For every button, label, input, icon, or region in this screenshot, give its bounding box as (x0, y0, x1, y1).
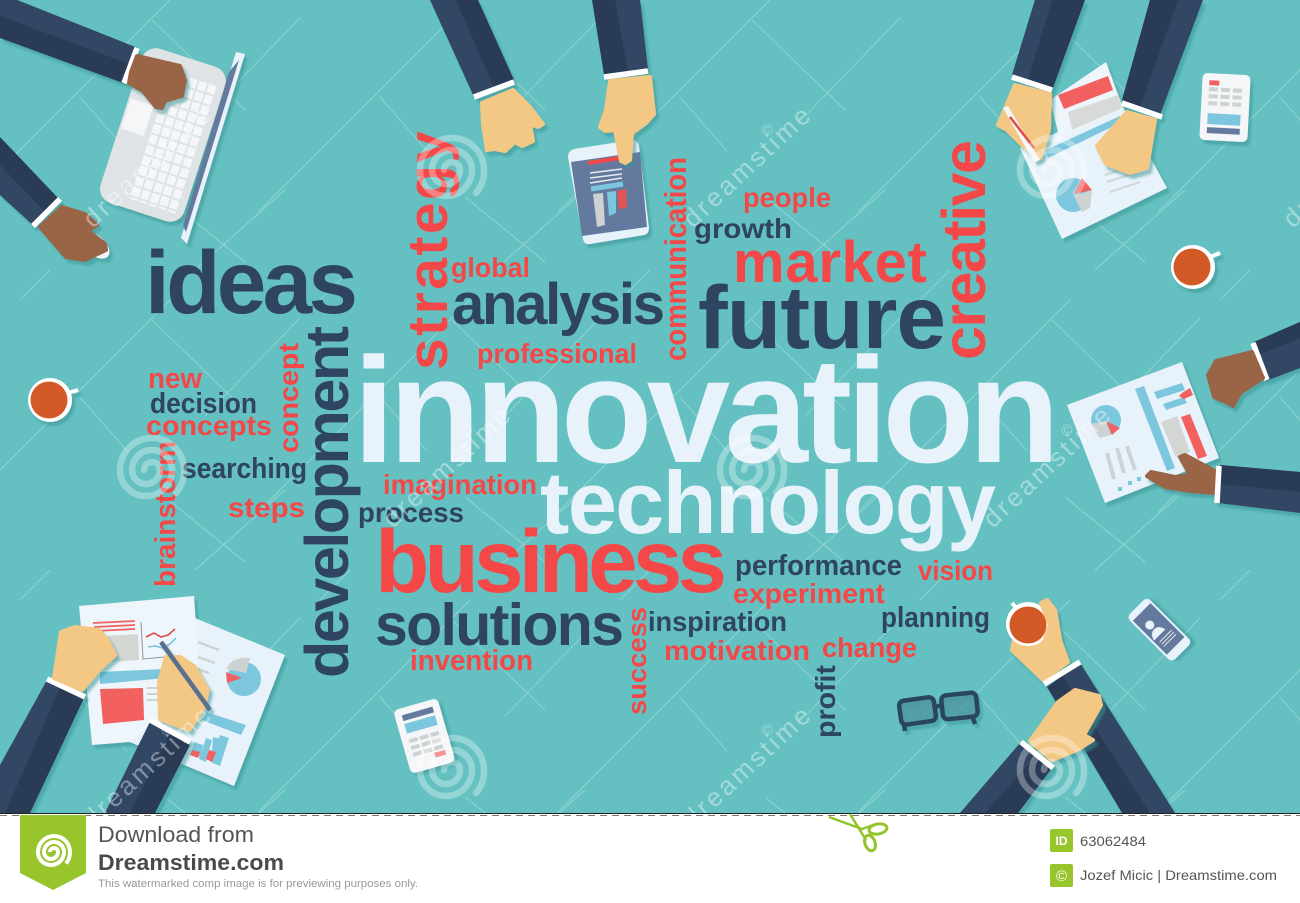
word: experiment: experiment (733, 578, 885, 609)
documents: top right (1020, 62, 1167, 239)
word: motivation: motivation (664, 635, 810, 666)
spiral mark: bottom right (1020, 738, 1084, 796)
word: steps: steps (228, 492, 305, 523)
word: concepts: concepts (146, 410, 272, 441)
word: profit: profit (810, 665, 841, 738)
phone (1126, 597, 1192, 663)
word: development: development (293, 326, 361, 678)
word: imagination: imagination (383, 469, 537, 500)
watermark: bottom left: dreamstime (77, 700, 216, 833)
word: growth: growth (694, 213, 792, 244)
id badge: ID (1056, 834, 1068, 848)
watermark: middle: dreamstime (377, 400, 516, 533)
word: vision: vision (918, 555, 993, 586)
word: searching: searching (182, 453, 307, 485)
word: creative: creative (930, 140, 998, 360)
word: success: success (622, 607, 652, 715)
arm: bottom left second with pen (105, 642, 210, 813)
word: market: market (733, 230, 927, 295)
coffee cup in hand (1006, 600, 1068, 680)
watermark: top centre: © (761, 122, 773, 139)
arm: right upper (1208, 322, 1300, 406)
arm: top centre right pointing (592, 0, 654, 163)
arm: bottom left first (0, 627, 115, 813)
watermark: bottom centre: © (761, 722, 773, 739)
copyright badge: © (1056, 868, 1067, 885)
word: invention: invention (410, 645, 533, 677)
word: change: change (822, 632, 917, 663)
watermark: bottom left: © (161, 722, 173, 739)
dreamstime brand: Dreamstime.com (98, 850, 284, 875)
word: performance: performance (735, 550, 902, 582)
coffee cup: left (28, 378, 78, 422)
arm: top right second (1097, 0, 1203, 173)
word: people: people (743, 182, 831, 213)
arm: bottom right crossing (960, 690, 1101, 813)
word: technology: technology (540, 453, 996, 552)
watermark: top centre: dreamstime (677, 100, 816, 233)
glasses (898, 692, 978, 731)
spiral mark: top right (1020, 138, 1084, 196)
coffee cup: top right (1171, 245, 1220, 289)
spiral mark: centre (720, 438, 784, 496)
copyright badge (1050, 864, 1073, 887)
word: innovation: innovation (353, 326, 1060, 494)
watermark: right: dreamstime (977, 400, 1116, 533)
document: right (1067, 362, 1219, 503)
word: global: global (451, 252, 530, 283)
word: solutions: solutions (375, 592, 624, 658)
word: inspiration: inspiration (648, 606, 787, 637)
word: analysis: analysis (452, 272, 665, 337)
footer strip (0, 814, 1300, 903)
spiral mark: top centre (420, 138, 484, 196)
arm: right lower (1147, 455, 1300, 513)
word: business: business (375, 511, 727, 611)
tablet (568, 140, 649, 244)
word: process: process (358, 497, 464, 528)
watermark spirals (120, 138, 1084, 796)
arm: top right first with pen (998, 0, 1085, 162)
calculator: top right (1199, 73, 1251, 142)
download text: Download from (98, 822, 254, 847)
word: concept: concept (273, 343, 304, 453)
word cloud (145, 131, 1060, 738)
laptop (96, 44, 245, 244)
watermark: middle: © (461, 422, 473, 439)
id number: 63062484 (1080, 833, 1146, 849)
icon: scissors (829, 814, 888, 852)
watermark: right: © (1061, 422, 1073, 439)
word: future: future (698, 267, 946, 367)
word: planning: planning (881, 602, 990, 634)
watermark text (77, 100, 1300, 833)
arm: left with mouse (0, 137, 114, 264)
watermark: top left: dreamstime (77, 100, 216, 233)
word: decision: decision (150, 388, 257, 420)
word: professional: professional (477, 338, 637, 369)
watermark: bottom centre: dreamstime (677, 700, 816, 833)
word: new: new (148, 363, 202, 395)
logo badge (20, 815, 86, 890)
arm: top-left on laptop (0, 0, 185, 108)
word: ideas: ideas (145, 232, 358, 332)
word: communication: communication (658, 157, 693, 361)
disclaimer: This watermarked comp image is for previewing purposes only. (98, 878, 418, 890)
id badge (1050, 829, 1073, 852)
word: strategy: strategy (396, 131, 460, 370)
documents: bottom left (79, 596, 285, 786)
watermark: top left: © (161, 122, 173, 139)
spiral mark: bottom centre (420, 738, 484, 796)
arm: bottom right holding cup (1044, 662, 1175, 813)
author credit: Jozef Micic | Dreamstime.com (1080, 867, 1277, 883)
spiral mark: left (120, 438, 184, 496)
arm: top centre left (430, 0, 543, 151)
word: brainstorm: brainstorm (150, 441, 182, 587)
calculator: bottom centre (393, 698, 455, 774)
